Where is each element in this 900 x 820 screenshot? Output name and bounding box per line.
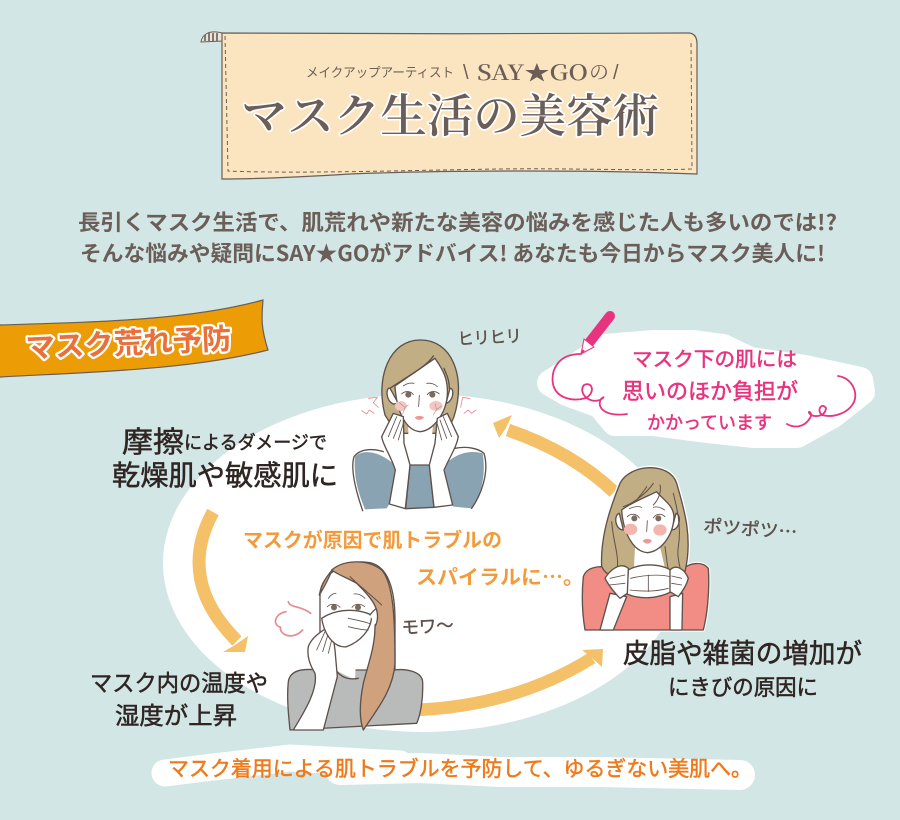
subtitle: メイクアップアーティスト <box>306 62 454 81</box>
brush background <box>165 758 740 775</box>
illustration: woman wearing mask <box>275 562 423 730</box>
callout text <box>622 343 798 435</box>
text: sebum <box>623 632 862 702</box>
section ribbon <box>0 300 268 377</box>
bottom text: マスク着用による肌トラブルを予防して、ゆるぎない美肌へ。 <box>168 753 752 783</box>
cloud background <box>550 343 862 435</box>
text: humidity <box>90 664 268 731</box>
subtitle: の <box>589 56 609 85</box>
section ribbon: マスク荒れ予防 <box>25 316 232 367</box>
text: sebum: 皮脂や雑菌の増加が <box>623 632 862 671</box>
bottom message <box>165 753 752 783</box>
illustration: woman with dry skin <box>353 340 486 511</box>
white ellipse <box>163 394 683 732</box>
subtitle: \ <box>463 62 469 84</box>
label: hiri hiri: ヒリヒリ <box>457 322 522 350</box>
center spiral text: スパイラルに…。 <box>416 561 584 590</box>
text: sebum: にきびの原因に <box>668 670 818 702</box>
text: humidity: マスク内の温度や <box>90 664 268 698</box>
subtitle: SAY★GO <box>477 57 588 87</box>
intro text: そんな悩みや疑問にSAY★GOがアドバイス! あなたも今日からマスク美人に! <box>80 237 825 268</box>
callout text: マスク下の肌には <box>632 343 797 372</box>
intro text <box>78 206 837 268</box>
text: friction damage: 乾燥肌や敏感肌に <box>112 454 338 494</box>
subtitle: / <box>613 62 619 84</box>
icon: pink pencil <box>581 316 610 354</box>
label: mowa: モワ〜 <box>401 611 454 640</box>
squiggle left <box>553 354 627 415</box>
callout cloud <box>550 316 862 435</box>
illustration: woman with acne holding mask <box>582 468 709 630</box>
label: potsu potsu: ポツポツ… <box>703 512 798 545</box>
callout text: 思いのほか負担が <box>622 374 798 406</box>
main title: マスク生活の美容術 <box>241 80 659 146</box>
arrow: bottom to right <box>415 649 603 710</box>
text: friction damage <box>112 419 338 494</box>
intro text: 長引くマスク生活で、肌荒れや新たな美容の悩みを感じた人も多いのでは!? <box>78 206 837 237</box>
arrow: left to bottom <box>199 512 248 652</box>
squiggle right <box>787 376 855 426</box>
title banner <box>201 32 697 179</box>
center spiral text <box>243 524 584 590</box>
arrow: top-right to top <box>493 415 614 492</box>
text: friction damage: によるダメージで <box>184 429 327 455</box>
text: friction damage: 摩擦 <box>122 419 184 461</box>
text: humidity: 湿度が上昇 <box>115 696 237 731</box>
subtitle <box>306 56 619 87</box>
callout text: かかっています <box>647 409 772 435</box>
center spiral text: マスクが原因で肌トラブルの <box>243 524 502 553</box>
